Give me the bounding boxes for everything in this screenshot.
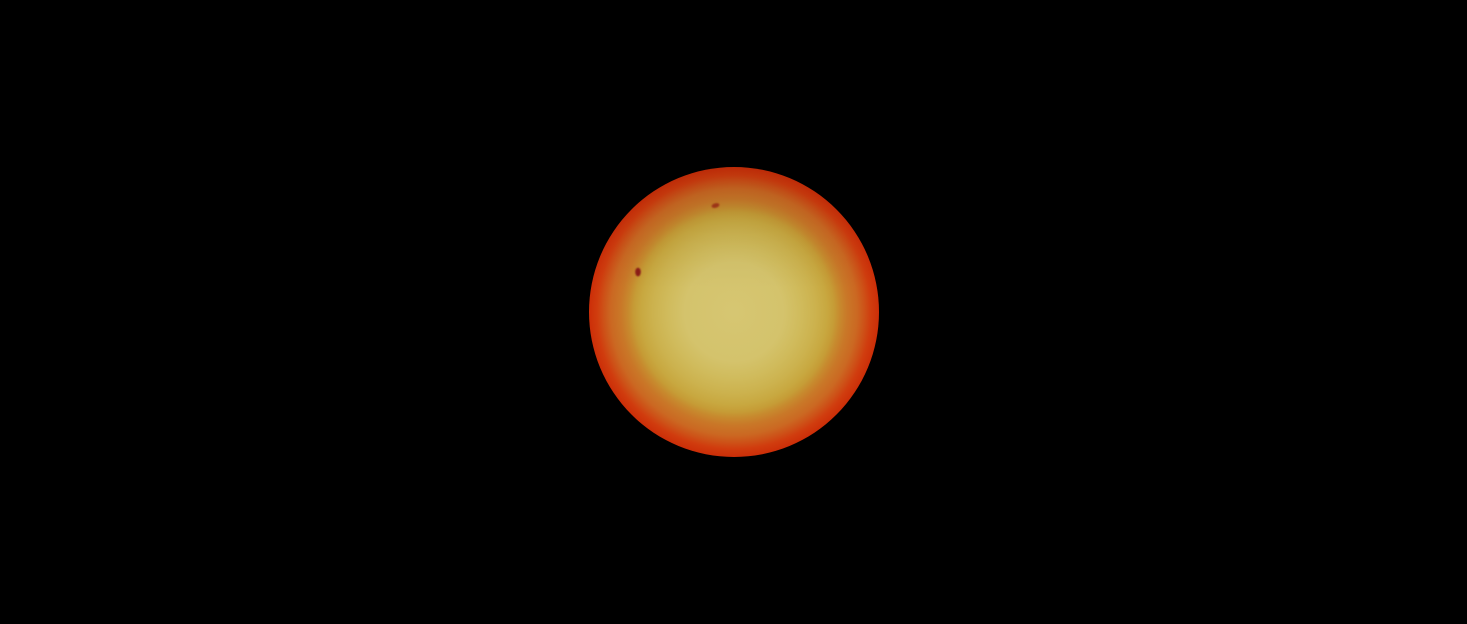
sun disc <box>589 167 879 457</box>
disc top shading <box>589 167 879 457</box>
sun <box>589 167 879 457</box>
sunspot: top <box>711 202 720 209</box>
sunspot: left <box>635 268 641 276</box>
